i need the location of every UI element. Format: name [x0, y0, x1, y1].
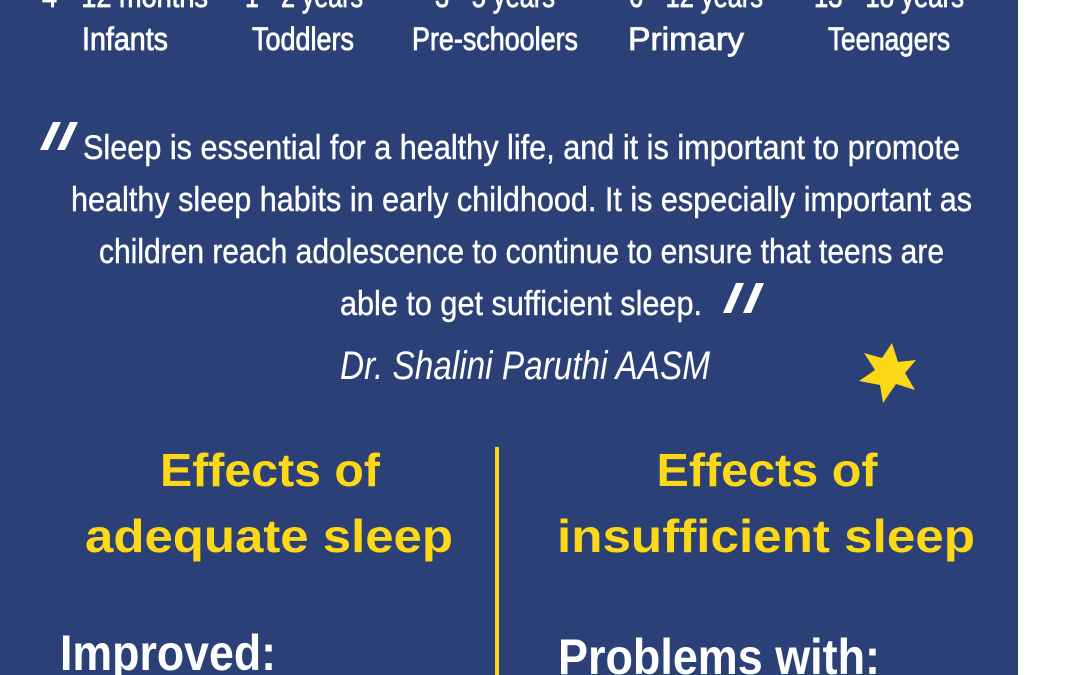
heading: insufficient sleep: Effects of	[656, 444, 878, 496]
age groups row: Pre-schoolers	[412, 21, 578, 57]
quote text: Sleep is essential for a healthy life, and it is important to promote	[83, 129, 960, 167]
heading: adequate sleep: adequate sleep	[85, 510, 453, 562]
heading: adequate sleep	[85, 444, 453, 562]
heading: insufficient sleep: insufficient sleep	[557, 510, 975, 562]
author: Dr. Shalini Paruthi AASM	[340, 344, 711, 388]
age groups row: Infants	[82, 21, 168, 57]
heading: adequate sleep: Effects of	[160, 444, 381, 496]
icon: open quote	[40, 122, 78, 150]
age groups row: Toddlers	[252, 21, 354, 57]
age groups row: Teenagers	[828, 21, 950, 57]
quote text: children reach adolescence to continue to ensure that teens are	[99, 233, 944, 271]
icon: star	[859, 343, 916, 403]
quote text: healthy sleep habits in early childhood. It is especially important as	[71, 181, 972, 219]
heading: insufficient sleep	[557, 444, 975, 562]
icon: close quote	[723, 283, 764, 313]
quote text	[71, 129, 972, 323]
divider	[495, 447, 499, 675]
age groups row	[42, 0, 964, 57]
age groups row: Primary	[628, 21, 744, 57]
quote text: able to get sufficient sleep.	[340, 285, 702, 323]
